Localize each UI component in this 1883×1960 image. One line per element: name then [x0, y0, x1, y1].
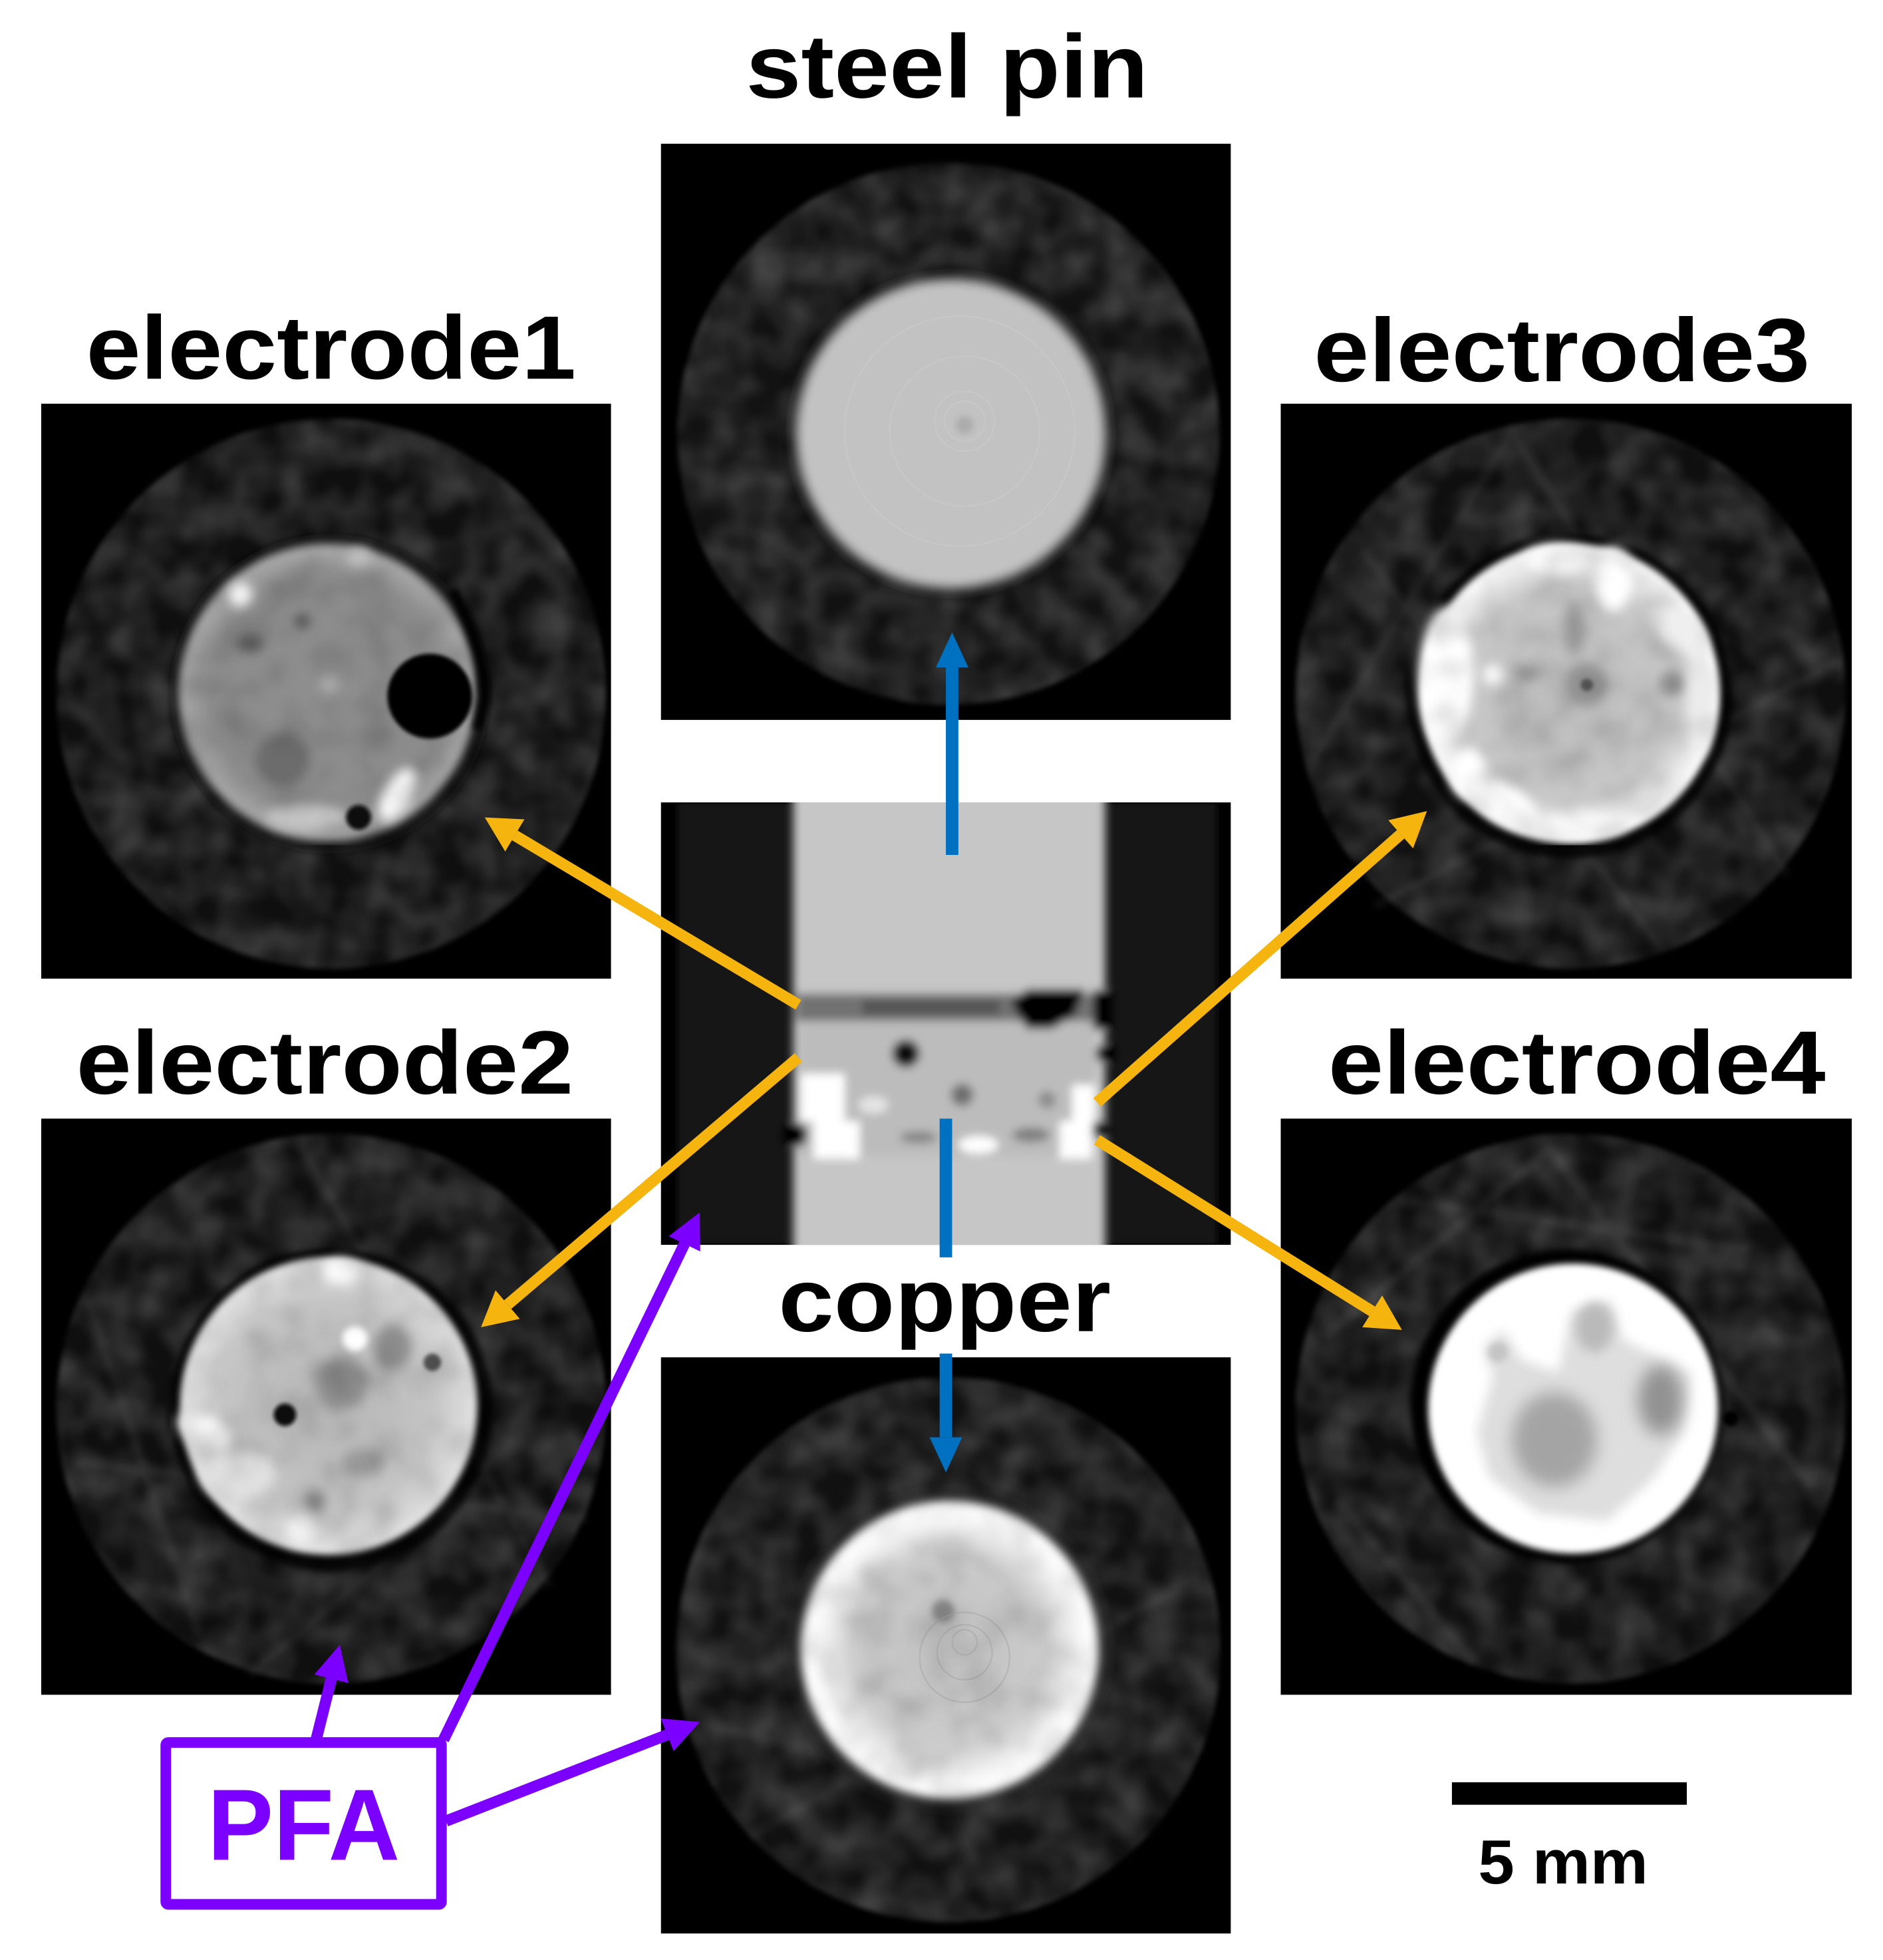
- title: electrode2: electrode2: [76, 1013, 573, 1113]
- title: electrode3: electrode3: [1314, 300, 1810, 401]
- arrow: purple to central slice: [444, 1244, 684, 1740]
- title: steel pin: steel pin: [746, 17, 1148, 117]
- arrow: purple to electrode2: [316, 1679, 331, 1740]
- arrow: orange to electrode1: [515, 836, 798, 1005]
- arrow: blue to steel pin: [948, 667, 955, 855]
- arrow: blue to copper upper segment: [942, 1118, 949, 1257]
- title: electrode1: electrode1: [86, 297, 576, 398]
- title: copper: copper: [778, 1250, 1111, 1351]
- scale bar: 5 mm: [1452, 1782, 1687, 1897]
- arrow: orange to electrode4: [1097, 1140, 1372, 1311]
- panel: electrode2 cross-section: [41, 1118, 611, 1695]
- arrow: blue to copper lower segment: [942, 1354, 949, 1437]
- arrow: purple to copper: [446, 1734, 667, 1821]
- callout: PFA label: [166, 1742, 442, 1904]
- panel: electrode1 cross-section: [41, 404, 611, 979]
- arrow: orange to electrode3: [1097, 834, 1401, 1102]
- panel: steel pin cross-section: [661, 144, 1231, 720]
- scale bar: 5 mm: 5 mm: [1478, 1827, 1648, 1897]
- panel: electrode4 cross-section: [1281, 1118, 1852, 1695]
- panel: copper cross-section: [661, 1357, 1231, 1933]
- callout: PFA label: PFA: [208, 1768, 400, 1881]
- panel: central vertical slice: [661, 788, 1231, 1262]
- arrow: orange to electrode2: [507, 1057, 798, 1305]
- title: electrode4: electrode4: [1328, 1013, 1826, 1113]
- panel: electrode3 cross-section: [1281, 404, 1852, 979]
